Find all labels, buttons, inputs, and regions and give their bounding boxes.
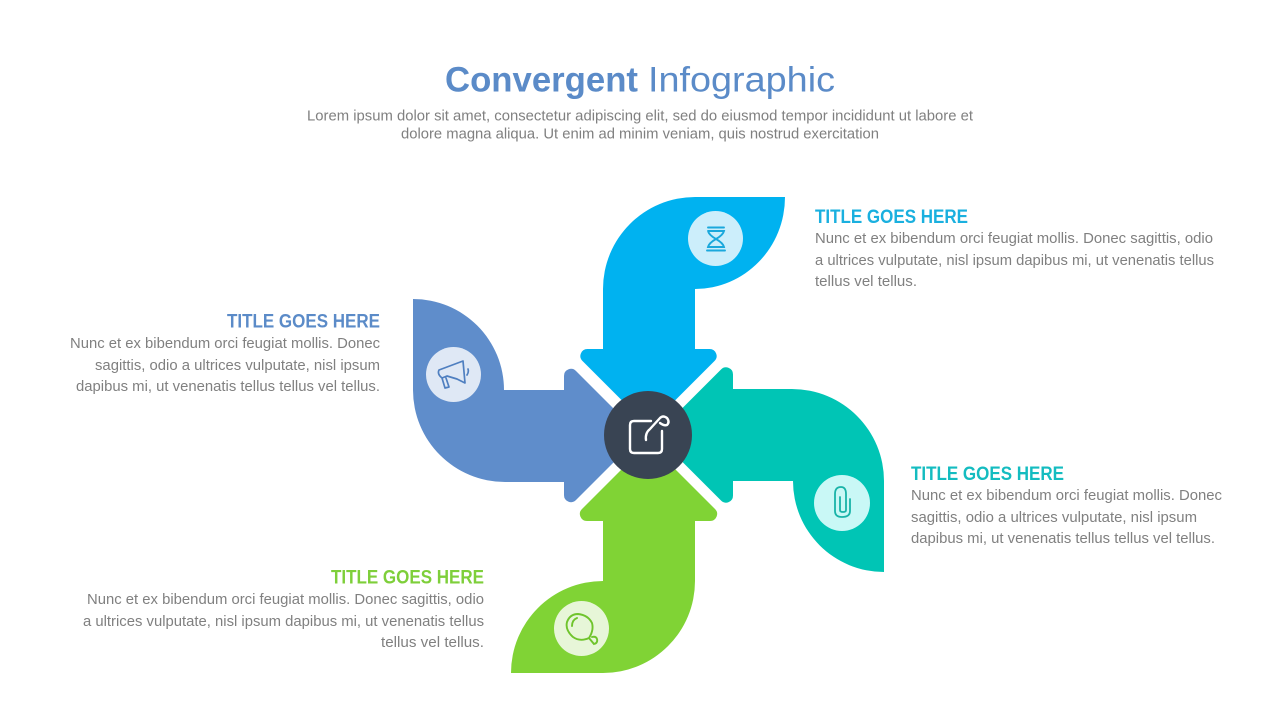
- icon: paperclip: [814, 475, 870, 531]
- text block: slate blue left: dapibus mi, ut venenatis tellus tellus vel tellus.: [76, 379, 380, 395]
- text block: green bottom: Nunc et ex bibendum orci feugiat mollis. Donec sagittis, odio: [87, 592, 484, 608]
- subtitle: [307, 108, 973, 142]
- text block: teal right: [911, 464, 1222, 547]
- text block: blue top: tellus vel tellus.: [815, 274, 917, 290]
- text block: slate blue left: sagittis, odio a ultrices vulputate, nisl ipsum: [95, 358, 380, 374]
- text block: green bottom: tellus vel tellus.: [381, 635, 484, 651]
- text block: slate blue left: [70, 312, 380, 395]
- title: Infographic: [648, 60, 835, 100]
- text block: green bottom: [83, 568, 484, 651]
- title: [445, 60, 835, 100]
- text block: blue top: Nunc et ex bibendum orci feugiat mollis. Donec sagittis, odio: [815, 231, 1213, 247]
- icon: magnifier: [554, 601, 609, 656]
- text block: teal right: TITLE GOES HERE: [911, 464, 1064, 485]
- text block: green bottom: a ultrices vulputate, nisl ipsum dapibus mi, ut venenatis tellus: [83, 614, 484, 630]
- centre circle with edit icon: [604, 391, 692, 479]
- subtitle: Lorem ipsum dolor sit amet, consectetur adipiscing elit, sed do eiusmod tempor incididunt ut labore et: [307, 108, 973, 124]
- subtitle: dolore magna aliqua. Ut enim ad minim veniam, quis nostrud exercitation: [401, 126, 879, 142]
- text block: teal right: dapibus mi, ut venenatis tellus tellus vel tellus.: [911, 531, 1215, 547]
- arrow: blue top: [580, 197, 785, 427]
- text block: slate blue left: TITLE GOES HERE: [227, 312, 380, 332]
- arrow: slate blue left: [413, 299, 640, 502]
- text block: teal right: Nunc et ex bibendum orci feugiat mollis. Donec: [911, 488, 1222, 504]
- text block: green bottom: TITLE GOES HERE: [331, 568, 484, 588]
- arrow: green bottom: [511, 442, 717, 673]
- icon: hourglass: [688, 211, 743, 266]
- arrow: teal right: [656, 367, 884, 572]
- text block: blue top: a ultrices vulputate, nisl ipsum dapibus mi, ut venenatis tellus: [815, 253, 1214, 269]
- title: Convergent: [445, 60, 638, 100]
- text block: slate blue left: Nunc et ex bibendum orci feugiat mollis. Donec: [70, 336, 380, 352]
- text block: teal right: sagittis, odio a ultrices vulputate, nisl ipsum: [911, 510, 1197, 526]
- text block: blue top: [815, 207, 1214, 290]
- text block: blue top: TITLE GOES HERE: [815, 207, 968, 228]
- icon: megaphone: [426, 347, 481, 402]
